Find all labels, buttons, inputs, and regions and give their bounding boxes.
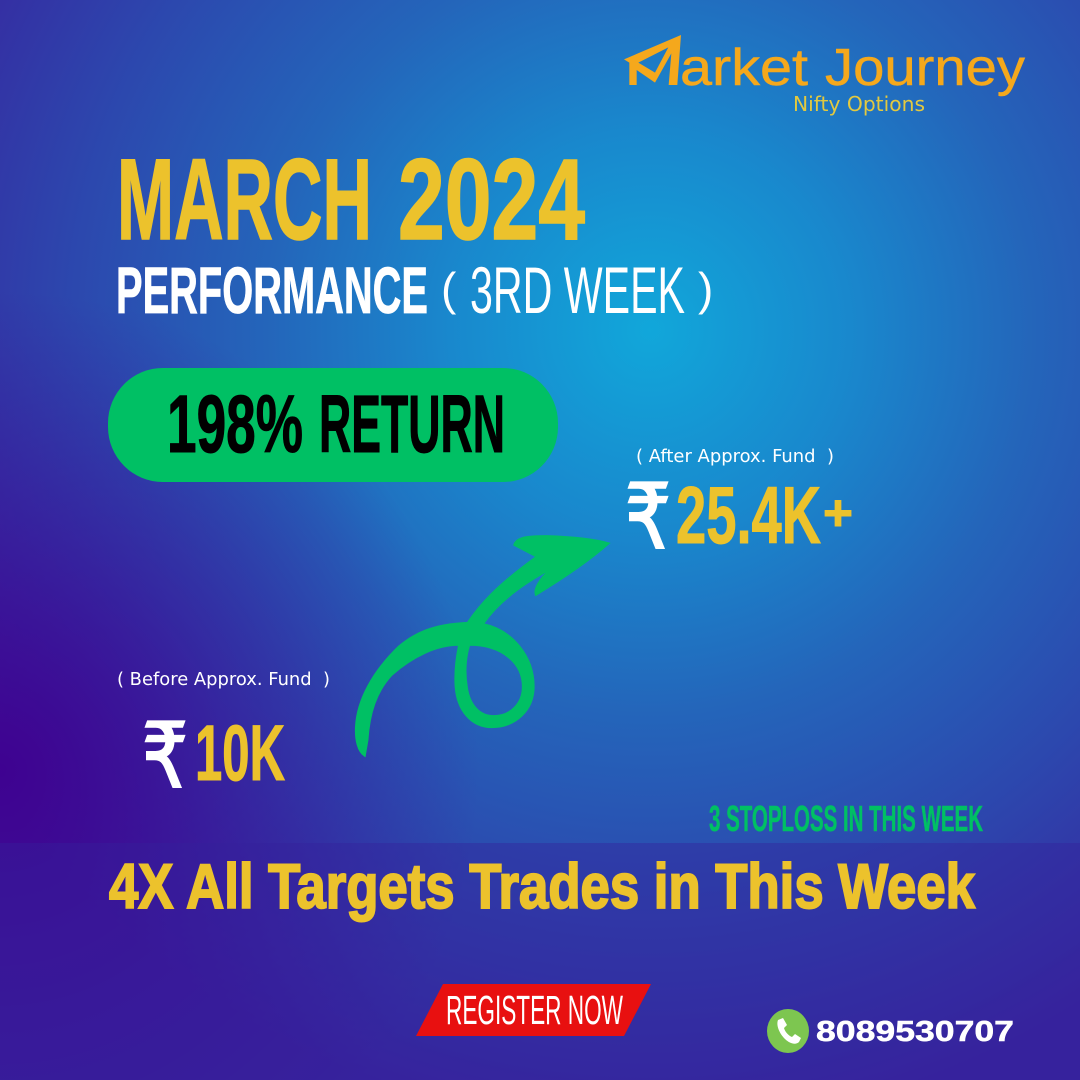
subtitle: Performance 3rd week: ( (441, 263, 457, 315)
value: before fund 10K (142, 704, 285, 809)
badge: 198% return (108, 368, 558, 482)
value: after fund 25.4K+ (625, 465, 853, 570)
value: before fund 10K: ₹ (142, 704, 188, 809)
badge: 198% return: 198% (167, 379, 303, 470)
icon: phone (767, 1009, 809, 1053)
arrow: growth curve with loop (356, 536, 609, 756)
value: after fund 25.4K+: ₹ (625, 465, 671, 570)
label: before approx fund: ( Before Approx. Fund ) (117, 670, 330, 690)
logo: Market Journey (624, 35, 1025, 116)
phone number: 8089530707 (816, 1016, 1014, 1048)
logo tagline: Nifty Options (793, 92, 925, 116)
value: before fund 10K: 10K (195, 708, 285, 797)
subtitle: Performance 3rd week: PERFORMANCE (116, 253, 428, 327)
value: after fund 25.4K+: + (823, 485, 853, 541)
button: register now: REGISTER NOW (446, 987, 623, 1033)
contact: phone number (767, 1009, 1014, 1053)
logo wordmark: Journey (825, 39, 1025, 97)
badge: 198% return: RETURN (319, 379, 505, 470)
icon: logo paper-plane M (624, 35, 681, 85)
logo wordmark (680, 39, 1025, 97)
title: March 2024: MARCH (117, 136, 372, 264)
logo wordmark: arket (680, 39, 809, 97)
button: register now (416, 984, 651, 1036)
value: after fund 25.4K+: 25.4K (676, 471, 821, 561)
subtitle: Performance 3rd week: ) (698, 263, 713, 315)
label: after approx fund: ( After Approx. Fund ) (636, 447, 834, 467)
title: March 2024: 2024 (398, 136, 585, 264)
subtitle: Performance 3rd week: 3RD WEEK (470, 253, 685, 327)
